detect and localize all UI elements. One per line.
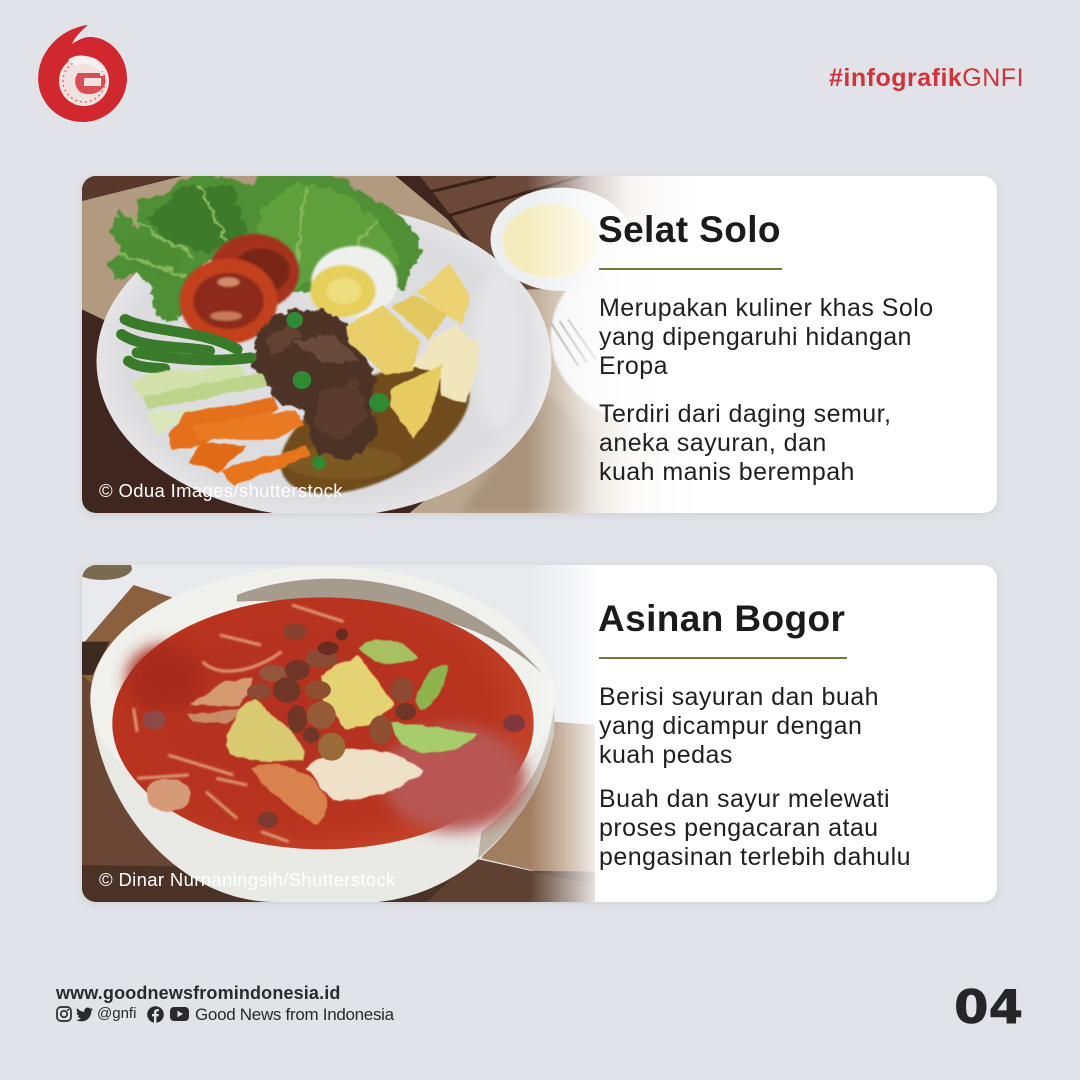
white jicama — [306, 749, 423, 802]
description 1: yang dicampur dengan — [599, 712, 862, 740]
cucumber — [130, 366, 266, 436]
description 1 — [599, 683, 879, 769]
lettuce — [110, 173, 423, 323]
shredded vegetables — [134, 605, 344, 842]
description 1: kuah pedas — [599, 741, 733, 769]
description 2: kuah manis berempah — [599, 458, 855, 486]
large side plate and fork — [551, 246, 771, 426]
icon: twitter — [76, 1008, 93, 1022]
icon: youtube — [170, 1007, 189, 1021]
icon: instagram — [56, 1006, 72, 1022]
peanuts — [143, 624, 525, 828]
bowl — [90, 566, 554, 902]
boiled egg — [310, 246, 397, 318]
description 2: pengasinan terlebih dahulu — [599, 843, 911, 871]
pineapple chunks — [225, 698, 306, 762]
potatoes — [346, 264, 478, 439]
panel: Selat Solo — [82, 176, 997, 513]
description 2 — [599, 400, 891, 486]
wooden board — [82, 585, 595, 902]
image credit: © Odua Images/shutterstock — [99, 480, 343, 501]
panel: Asinan Bogor — [82, 565, 997, 902]
icon: facebook — [147, 1006, 164, 1023]
social handle: @gnfi — [97, 1005, 136, 1022]
description 1: yang dipengaruhi hidangan — [599, 323, 912, 351]
title: Asinan Bogor — [598, 598, 845, 639]
logo: GNFI red swirl — [38, 25, 127, 122]
burlap cloth — [82, 176, 699, 513]
image credit: © Dinar Nurnaningsih/Shutterstock — [99, 869, 396, 890]
cucumber and lime — [359, 639, 418, 664]
description 2: aneka sayuran, dan — [599, 429, 827, 457]
orange slice — [251, 764, 327, 825]
beef — [251, 309, 378, 459]
page number: 04 — [954, 980, 1023, 1034]
description 2: proses pengacaran atau — [599, 814, 879, 842]
photo: selat solo plate — [82, 176, 642, 513]
tomatoes — [180, 234, 299, 344]
description 1: Merupakan kuliner khas Solo — [599, 294, 934, 322]
green peas — [286, 312, 389, 469]
description 1 — [599, 294, 934, 380]
title: Selat Solo — [598, 209, 781, 250]
soup — [112, 597, 534, 849]
description 2 — [599, 785, 911, 871]
plate — [96, 205, 551, 520]
social name: Good News from Indonesia — [195, 1005, 394, 1024]
website url: www.goodnewsfromindonesia.id — [56, 983, 341, 1003]
hashtag: #infografikGNFI — [829, 64, 1024, 92]
carrots — [168, 398, 309, 486]
green beans — [122, 319, 251, 369]
description 1: Eropa — [599, 352, 668, 380]
description 1: Berisi sayuran dan buah — [599, 683, 879, 711]
description 2: Buah dan sayur melewati — [599, 785, 890, 813]
photo: asinan bogor bowl — [82, 565, 595, 902]
side sauce bowl — [490, 188, 632, 291]
description 2: Terdiri dari daging semur, — [599, 400, 891, 428]
